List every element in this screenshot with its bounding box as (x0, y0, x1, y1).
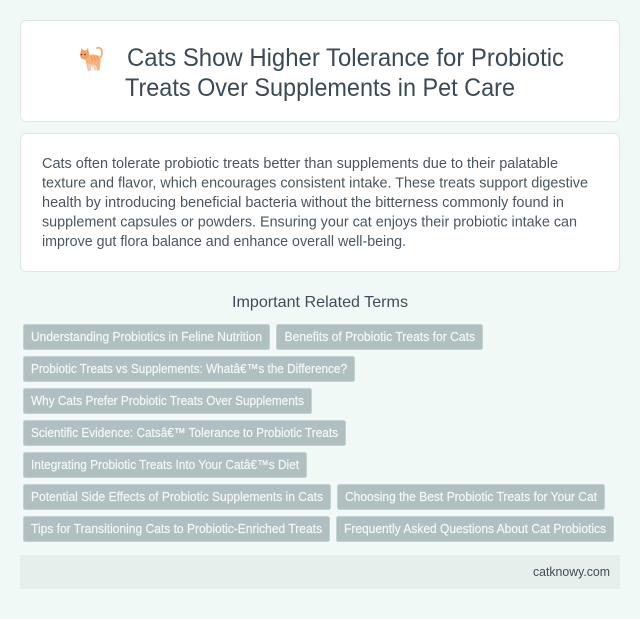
tag: Frequently Asked Questions About Cat Probiotics (344, 521, 606, 536)
tag (24, 484, 330, 510)
icon: cat (80, 48, 102, 71)
tag (336, 516, 614, 542)
footer (20, 555, 620, 589)
tag (338, 484, 604, 510)
heading: related terms: Important Related Terms (232, 294, 408, 311)
panel: summary paragraph: Cats often tolerate probiotic treats better than supplements due to their palatable (42, 156, 558, 172)
tag: Understanding Probiotics in Feline Nutrition (31, 329, 262, 344)
footer: catknowy.com (533, 564, 610, 579)
tag (24, 356, 354, 382)
tag: Benefits of Probiotic Treats for Cats (284, 329, 475, 344)
tag (24, 324, 270, 350)
tag: Integrating Probiotic Treats Into Your Catâ€™s Diet (31, 457, 299, 472)
tag list (24, 324, 614, 542)
tag: Why Cats Prefer Probiotic Treats Over Supplements (31, 393, 304, 408)
panel: summary paragraph (20, 134, 620, 272)
panel: summary paragraph: improve gut flora balance and enhance overall well-being. (42, 234, 406, 250)
tag (24, 516, 330, 542)
tag (24, 388, 312, 414)
tag: Choosing the Best Probiotic Treats for Your Cat (345, 489, 597, 504)
panel: summary paragraph: health by introducing beneficial bacteria without the bitterness commonly found in (42, 195, 564, 211)
panel: summary paragraph: texture and flavor, which encourages consistent intake. These treats support digestive (42, 176, 588, 192)
tag (24, 452, 306, 478)
tag (24, 420, 346, 446)
panel: summary paragraph: supplement capsules or powders. Ensuring your cat enjoys their probiotic intake can (42, 214, 577, 230)
title text: Treats Over Supplements in Pet Care (125, 74, 515, 102)
panel: title (20, 20, 620, 122)
tag (276, 324, 482, 350)
tag: Tips for Transitioning Cats to Probiotic-Enriched Treats (31, 521, 322, 536)
tag: Potential Side Effects of Probiotic Supplements in Cats (31, 489, 323, 504)
tag: Probiotic Treats vs Supplements: Whatâ€™s the Difference? (31, 361, 347, 376)
title text (125, 44, 564, 102)
title text: Cats Show Higher Tolerance for Probiotic (127, 44, 564, 72)
tag: Scientific Evidence: Catsâ€™ Tolerance to Probiotic Treats (31, 425, 338, 440)
